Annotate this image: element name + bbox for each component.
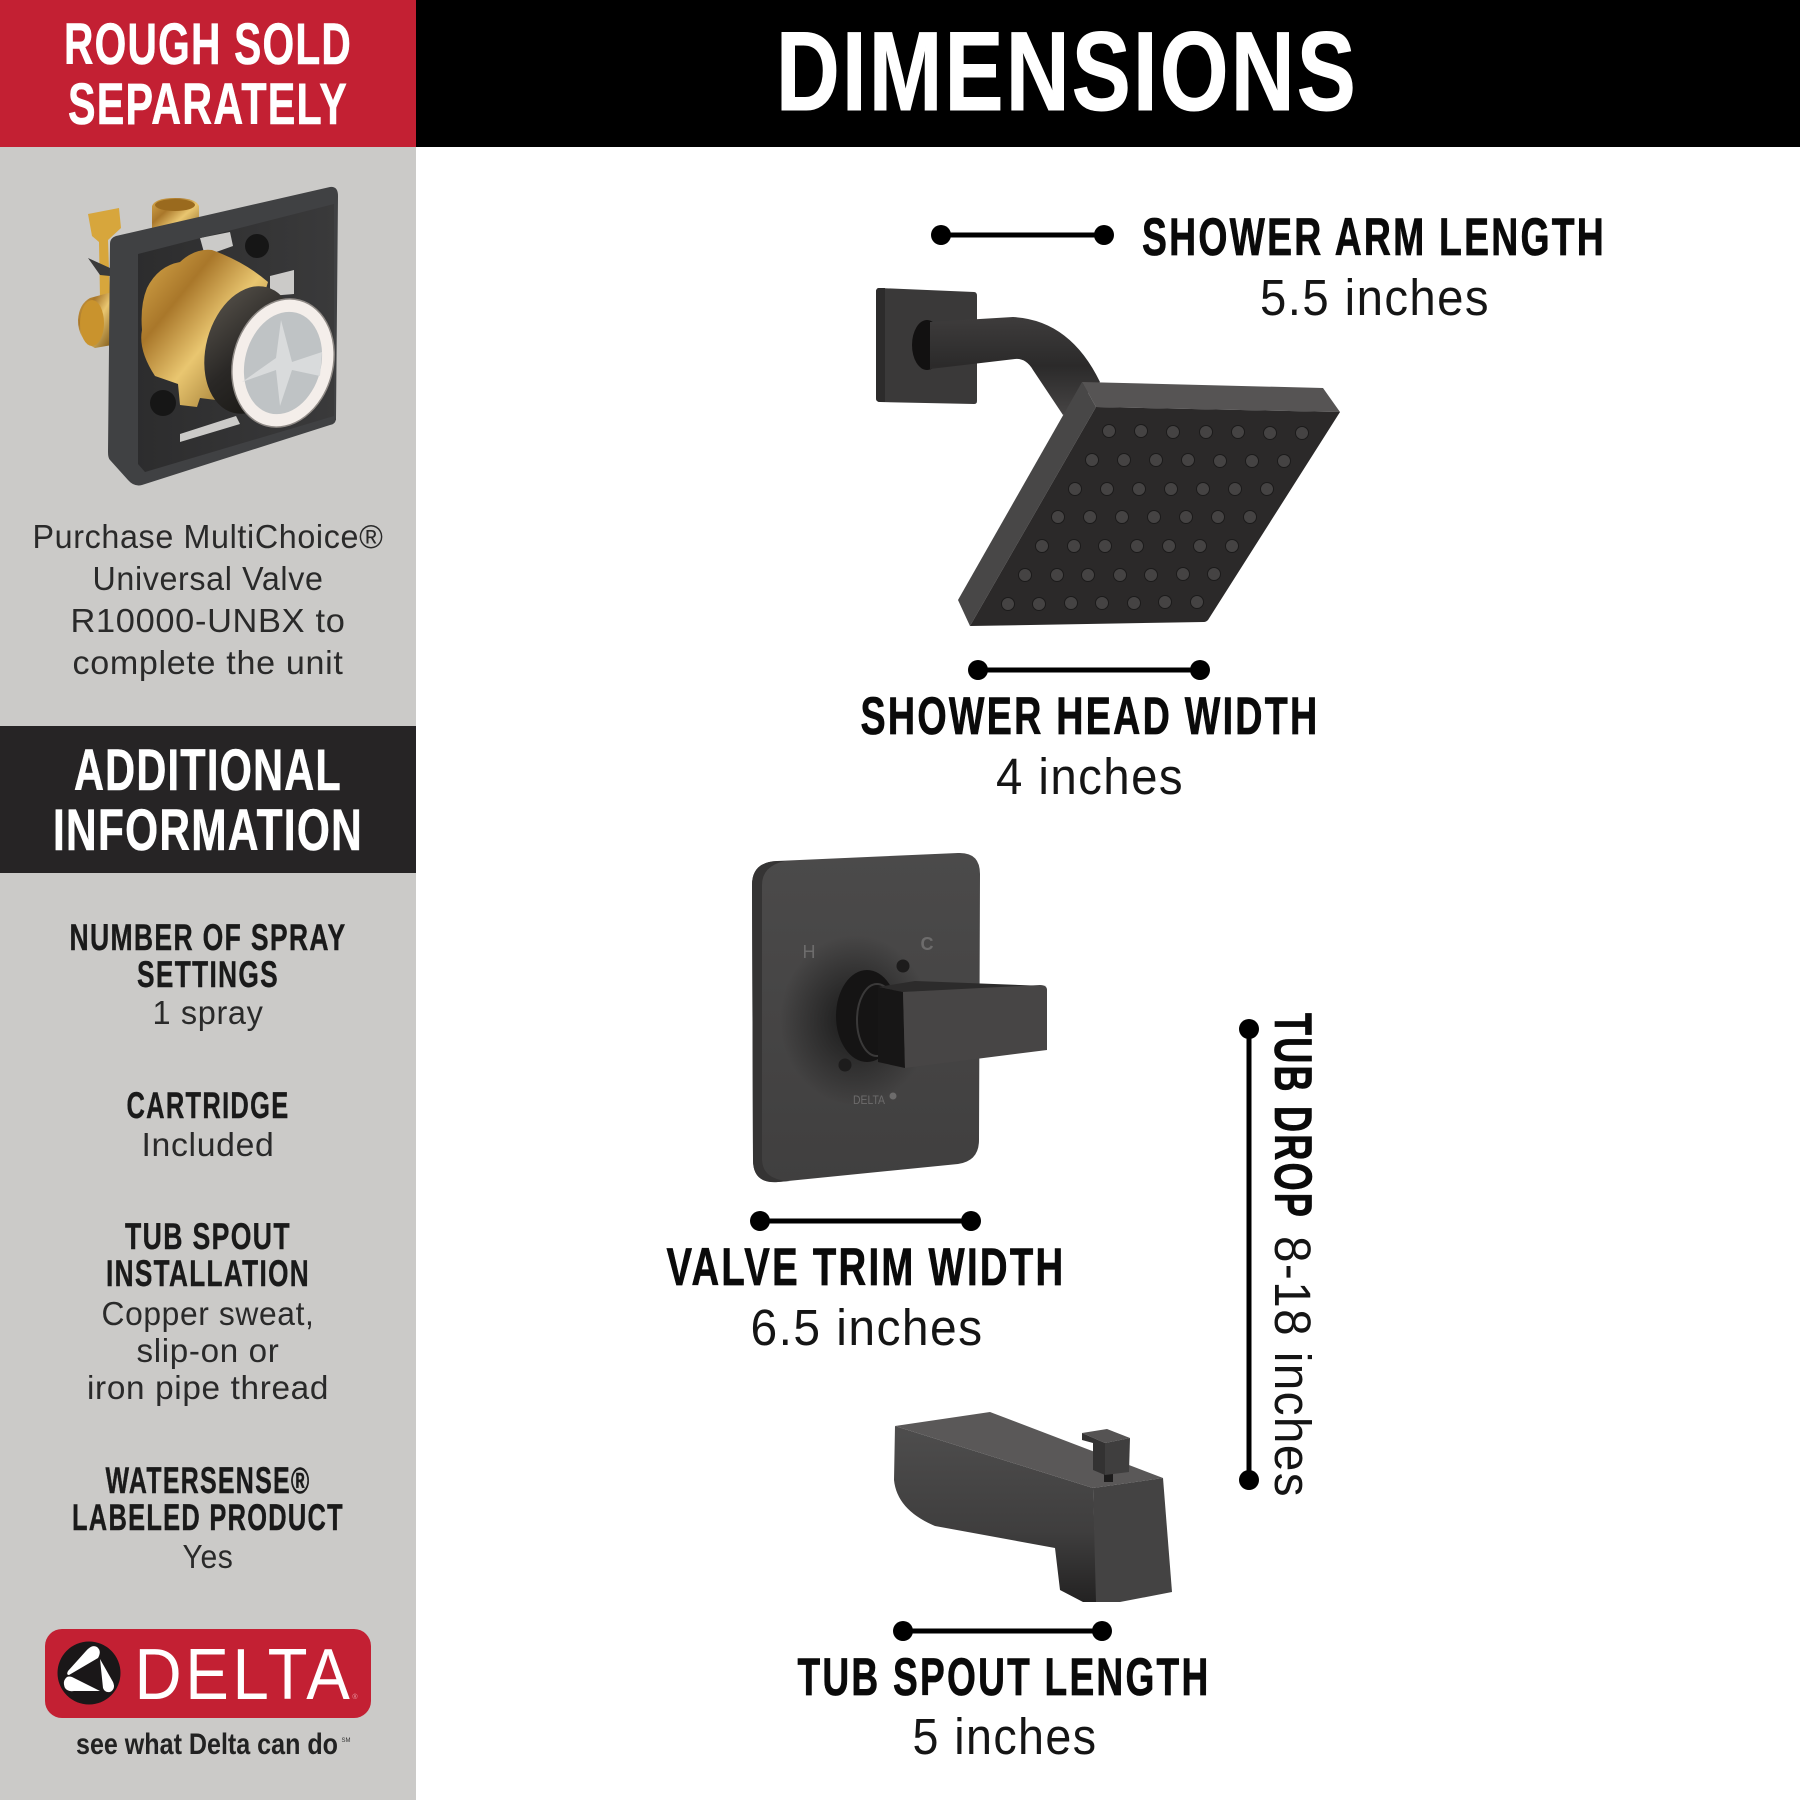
shower arm [930, 317, 1100, 415]
plate lettering: C [920, 934, 934, 954]
diverter stem [1104, 1472, 1113, 1482]
measure bar [893, 1621, 1112, 1641]
dimension: tub spout length: TUB SPOUT LENGTH [798, 1648, 1210, 1707]
dimension: valve trim width: 6.5 inches [750, 1299, 984, 1356]
text: valve purchase note: Universal Valve [92, 560, 324, 597]
image: shower head and arm [876, 288, 1340, 626]
grey cap [233, 303, 333, 423]
black collar [191, 276, 309, 424]
text: valve purchase note: complete the unit [72, 644, 344, 681]
handle lever [878, 981, 1047, 992]
measure bar [1239, 1019, 1259, 1490]
dimension: shower head width: 4 inches [996, 748, 1184, 805]
spec: number of spray settings: NUMBER OF SPRAY [70, 917, 346, 958]
spec: tub spout installation [87, 1216, 329, 1406]
head top edge [1082, 382, 1340, 412]
brass mounting tab [88, 208, 121, 298]
dimension: shower head width: SHOWER HEAD WIDTH [860, 687, 1320, 746]
chrome ring [218, 287, 348, 439]
dimension: valve trim width: VALVE TRIM WIDTH [666, 1238, 1066, 1297]
measure bar [968, 660, 1210, 680]
brass top pipe [152, 198, 199, 240]
spec: number of spray settings [70, 917, 346, 1031]
dimension: shower head width [860, 660, 1320, 805]
logo: delta: ® [352, 1693, 358, 1701]
plate lettering: H [802, 942, 816, 962]
measure bar [931, 225, 1114, 245]
spec: number of spray settings: SETTINGS [137, 954, 279, 995]
spec: tub spout installation: Copper sweat, [102, 1295, 314, 1332]
head left edge [958, 382, 1096, 626]
spec: watersense labeled product [72, 1460, 344, 1575]
logo mark [58, 1642, 120, 1704]
spec: watersense labeled product: LABELED PRODUCT [72, 1497, 344, 1538]
title banner: dimensions [416, 0, 1800, 147]
front lip of frame [108, 187, 338, 485]
image: tub spout [894, 1412, 1172, 1602]
spout side [894, 1426, 1097, 1602]
spout top [895, 1412, 1163, 1488]
banner: additional information: ADDITIONAL [74, 738, 342, 803]
banner: additional information [0, 726, 416, 873]
spray nozzles [1002, 424, 1308, 610]
dimension: tub spout length [798, 1621, 1210, 1765]
screws [896, 960, 910, 972]
image: rough-in valve [78, 187, 348, 485]
trim plate [752, 853, 980, 1182]
spec: tub spout installation: INSTALLATION [106, 1253, 310, 1294]
frame interior [134, 200, 336, 476]
measure bar [750, 1211, 981, 1231]
banner: rough sold separately: SEPARATELY [68, 72, 348, 137]
dimension: shower arm length: SHOWER ARM LENGTH [1142, 208, 1606, 267]
rubber grommets [245, 234, 269, 258]
cap cross [242, 320, 322, 406]
rear bracket left [88, 258, 110, 276]
text: valve purchase note: Purchase MultiChoice® [32, 518, 384, 555]
spec: cartridge: Included [142, 1126, 274, 1163]
logo: delta [45, 1629, 371, 1761]
banner: rough sold separately: ROUGH SOLD [64, 12, 352, 77]
banner: rough sold separately [0, 0, 416, 147]
brass left pipe [78, 292, 112, 348]
dimension: tub drop: 8-18 inches [1264, 1236, 1321, 1498]
head face [970, 407, 1340, 626]
dimension: tub drop: TUB DROP [1263, 1013, 1322, 1219]
handle rosette [836, 970, 898, 1062]
brass valve body [141, 250, 268, 407]
spec: tub spout installation: TUB SPOUT [125, 1216, 291, 1257]
plate side edge [752, 861, 790, 1182]
image: valve trim [752, 853, 1047, 1182]
logo: delta: DELTA [134, 1635, 354, 1715]
text: valve purchase note: R10000-UNBX to [70, 602, 346, 639]
spec: cartridge [126, 1085, 290, 1163]
spec: tub spout installation: iron pipe thread [87, 1369, 329, 1406]
logo: delta: see what Delta can do [76, 1728, 338, 1761]
wall flange [876, 288, 977, 404]
plate lettering [802, 934, 934, 1107]
spout front [1093, 1478, 1172, 1602]
dimension: valve trim width [666, 1211, 1066, 1356]
diverter knob [1082, 1429, 1130, 1443]
dimension: tub spout length: 5 inches [912, 1708, 1098, 1765]
logo: delta: SM [342, 1738, 351, 1744]
interior cut-out windows [180, 232, 294, 442]
title banner: dimensions: DIMENSIONS [776, 9, 1358, 134]
dimension: shower arm length: 5.5 inches [1260, 269, 1490, 326]
spec: tub spout installation: slip-on or [136, 1332, 280, 1369]
spec: watersense labeled product: WATERSENSE® [106, 1460, 310, 1501]
spec: cartridge: CARTRIDGE [126, 1085, 290, 1126]
handle shadow [780, 935, 930, 1105]
flange escutcheon [912, 320, 942, 370]
banner: additional information: INFORMATION [53, 798, 363, 863]
spec: watersense labeled product: Yes [182, 1538, 234, 1575]
panel: left sidebar [0, 0, 416, 1800]
plate lettering: DELTA [853, 1093, 885, 1107]
text: valve purchase note [32, 518, 384, 681]
spec: number of spray settings: 1 spray [152, 994, 264, 1031]
dimension: shower arm length [931, 208, 1606, 326]
dimension: tub drop [1239, 1013, 1322, 1498]
